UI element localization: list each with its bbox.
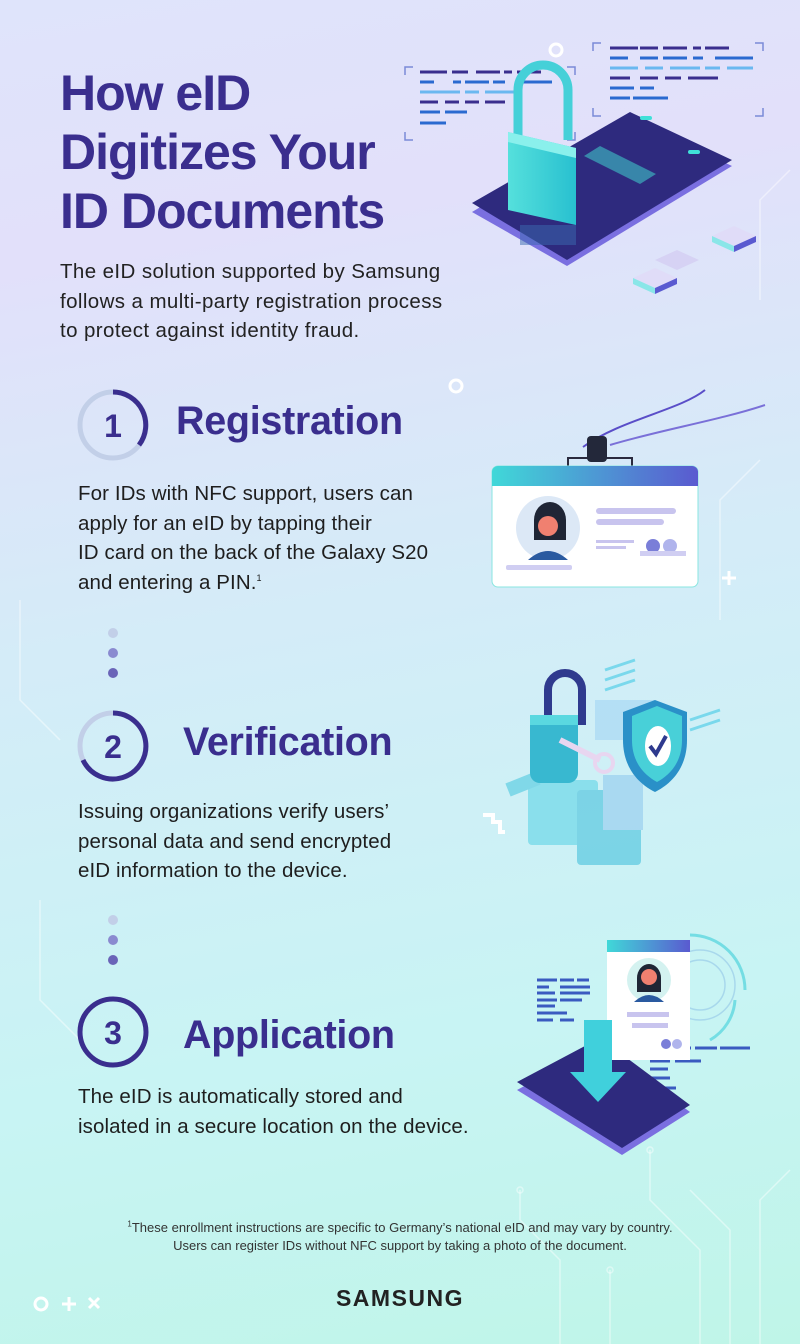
intro text: to protect against identity fraud. [60, 319, 360, 342]
heading: Registration: Registration [176, 399, 403, 443]
step markers [80, 392, 146, 1065]
illustration: phone with lock [405, 43, 763, 294]
text: registration: For IDs with NFC support, users can [78, 482, 413, 505]
heading: Application: Application [183, 1013, 395, 1057]
step markers: 3 [104, 1015, 122, 1051]
text: verification: personal data and send encrypted [78, 830, 391, 852]
footnote: 1These enrollment instructions are specific to Germany’s national eID and may vary by country. [127, 1220, 673, 1235]
heading: Verification: Verification [183, 720, 392, 764]
text: verification [78, 800, 391, 882]
text: application [78, 1085, 469, 1138]
text: registration: ID card on the back of the Galaxy S20 [78, 541, 428, 564]
step markers: 2 [104, 729, 122, 765]
text: application: The eID is automatically stored and [78, 1085, 403, 1108]
logo: Samsung: SAMSUNG [336, 1285, 464, 1311]
text: application: isolated in a secure location on the device. [78, 1114, 469, 1138]
text: verification: eID information to the device. [78, 859, 348, 882]
intro text: follows a multi-party registration process [60, 290, 443, 312]
illustration: lock, key and shield [483, 660, 720, 865]
intro text: The eID solution supported by Samsung [60, 260, 441, 283]
intro text [60, 260, 443, 342]
title: How eID [60, 65, 250, 121]
footnote: Users can register IDs without NFC support by taking a photo of the document. [173, 1238, 627, 1253]
title: Digitizes Your [60, 124, 375, 180]
title [60, 65, 384, 239]
step markers: 1 [104, 408, 122, 444]
text: verification: Issuing organizations verify users’ [78, 800, 389, 823]
text: registration: apply for an eID by tapping their [78, 512, 372, 534]
illustration: ID card [492, 390, 765, 587]
title: ID Documents [60, 183, 384, 239]
text: registration: and entering a PIN.1 [78, 570, 262, 594]
footnote [127, 1220, 673, 1253]
illustration: phone with downloaded ID [517, 935, 750, 1155]
text: registration [78, 482, 428, 594]
